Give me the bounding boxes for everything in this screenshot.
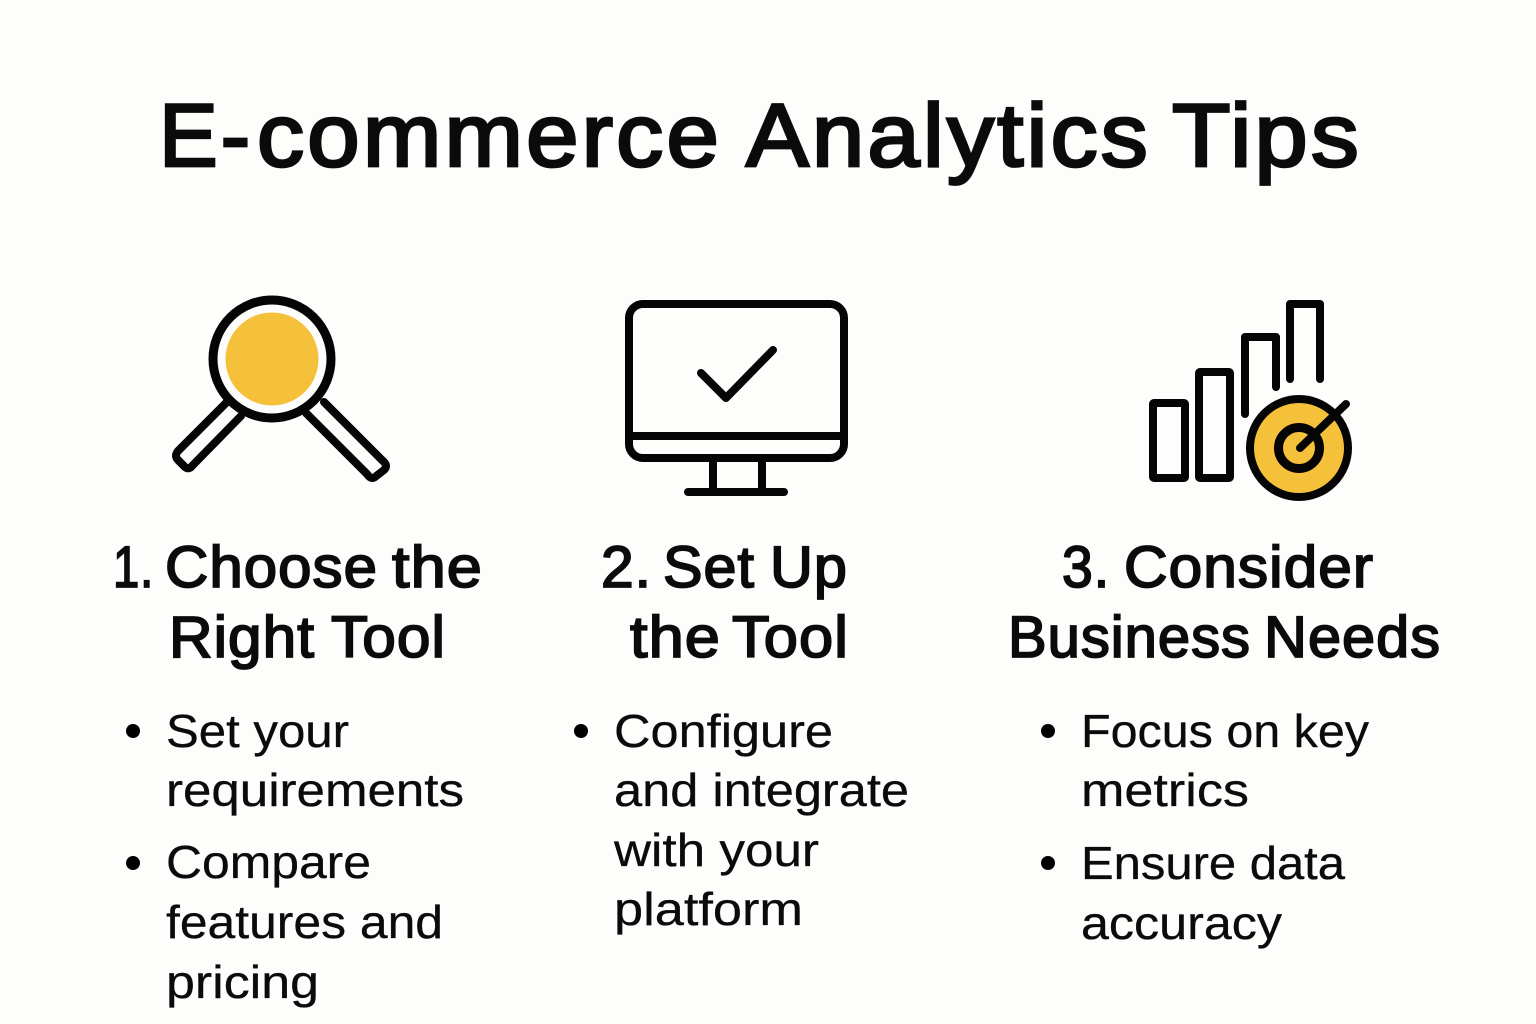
bullet list: step 3 [1041, 705, 1369, 949]
bullet list: step 3: accuracy [1081, 897, 1282, 949]
panel: set up the tool [574, 304, 909, 935]
bullet list: step 2: with your [613, 824, 819, 876]
heading: step 2: Set [663, 535, 755, 600]
icon: monitor with check mark [629, 304, 844, 492]
bullet list: step 2: Configure [614, 705, 833, 757]
bullet list: step 1: requirements [166, 764, 464, 816]
heading: step 3: 3. [1062, 535, 1110, 600]
heading: step 2: Up [770, 535, 848, 600]
bullet list: step 1 [126, 705, 464, 1008]
bullet list: step 3: metrics [1081, 764, 1249, 816]
heading: step 3: Needs [1264, 605, 1441, 670]
heading: step 1: Right [169, 605, 315, 670]
heading: step 3: Business [1008, 605, 1251, 670]
title: E- [159, 85, 253, 185]
heading: step 1: 1. [113, 535, 154, 600]
bullet list: step 2 [574, 705, 909, 935]
icon: bar chart with target [1153, 304, 1348, 497]
bullet list: step 3: Focus on key [1081, 705, 1369, 757]
panel: choose the right tool [113, 300, 483, 1008]
heading: step 1: the [392, 535, 483, 600]
bullet list: step 1: features and [166, 896, 443, 948]
bullet list: step 2: platform [614, 883, 803, 935]
bullet list: step 1: pricing [166, 956, 319, 1008]
heading: step 3 [1008, 535, 1441, 670]
heading: step 1 [113, 535, 483, 670]
heading: step 2: 2. [601, 535, 652, 600]
heading: step 2: the [630, 605, 721, 670]
panel: consider business needs [1008, 304, 1441, 949]
heading: step 2: Tool [732, 605, 849, 670]
icon: magnifying glass [176, 300, 386, 478]
bullet list: step 2: and integrate [614, 764, 909, 816]
heading: step 1: Choose [165, 535, 378, 600]
title: Analytics [746, 85, 1151, 185]
bullet list: step 3: Ensure data [1081, 837, 1345, 889]
title: commerce [257, 85, 722, 185]
heading: step 3: Consider [1124, 535, 1374, 600]
bullet list: step 1: Compare [166, 836, 371, 888]
title: Tips [1172, 85, 1362, 185]
heading: step 2 [601, 535, 849, 670]
bullet list: step 1: Set your [166, 705, 349, 757]
heading: step 1: Tool [331, 605, 446, 670]
